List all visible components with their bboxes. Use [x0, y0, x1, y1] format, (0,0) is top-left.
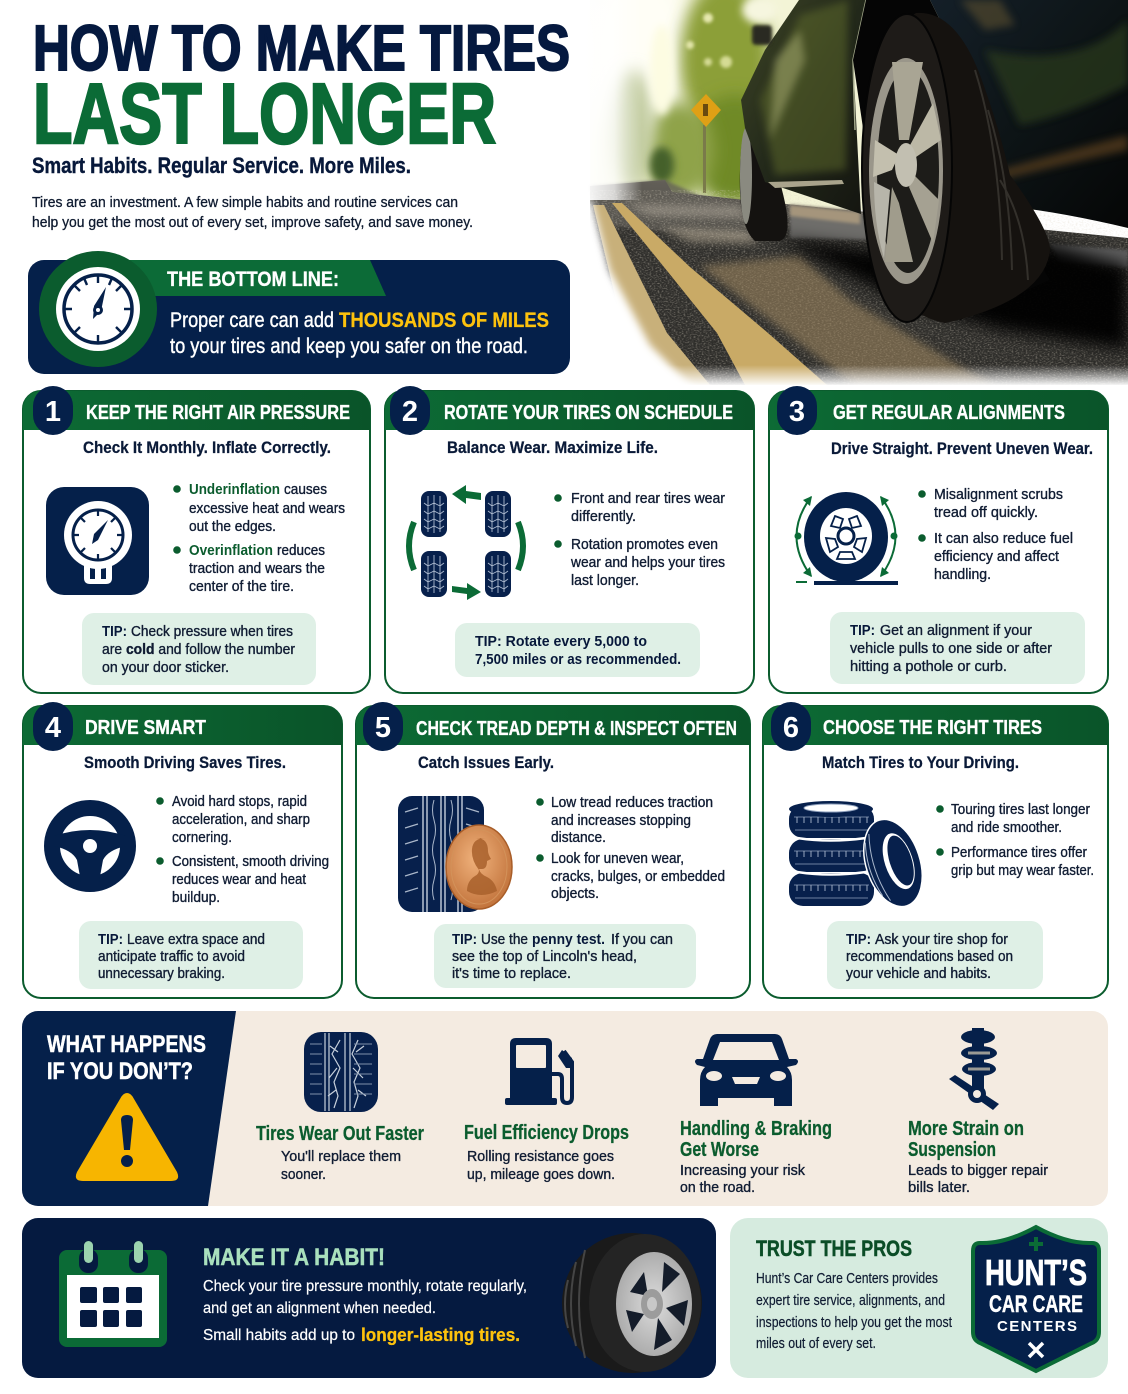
icon: stack of tires [789, 801, 933, 914]
panel: 2 rotate your tires on schedule [385, 386, 754, 693]
panel: 6 choose the right tires: and ride smoother. [951, 820, 1062, 836]
panel: 4 drive smart: buildup. [172, 890, 220, 906]
body text: Check your tire pressure monthly, rotate regularly, [203, 1278, 527, 1295]
panel: 1 keep the right air pressure: Overinflation [189, 543, 273, 559]
panel: 5 check tread depth: and increases stopping [551, 813, 691, 829]
panel: 4 drive smart: cornering. [172, 830, 232, 846]
panel: 5 check tread depth: distance. [551, 830, 606, 846]
panel: 5 check tread depth: CHECK TREAD DEPTH & INSPECT OFTEN [416, 718, 737, 740]
tip box: on your door sticker. [102, 660, 229, 676]
item: more strain on suspension: Leads to bigger repair [908, 1163, 1048, 1179]
item: tires wear out faster [256, 1123, 424, 1183]
panel: 1 keep the right air pressure: causes [284, 482, 327, 498]
logo: Hunt's badge [973, 1227, 1099, 1371]
panel: 4 drive smart: 4 [45, 712, 61, 744]
tip box: TIP: [846, 931, 871, 948]
panel: 4 drive smart: Avoid hard stops, rapid [172, 794, 307, 810]
panel: 5 check tread depth: Look for uneven wear, [551, 851, 684, 867]
tip box: TIP: [102, 623, 127, 640]
icon: calendar [59, 1241, 167, 1347]
body text [756, 1270, 953, 1352]
tip box [82, 613, 316, 685]
tip box [830, 612, 1085, 684]
icon: wheel alignment [794, 492, 898, 585]
heading: TRUST THE PROS [756, 1236, 912, 1261]
tip box: your vehicle and habits. [846, 966, 991, 982]
panel: 1 keep the right air pressure: Underinflation [189, 482, 280, 498]
icon: pressure gauge [46, 487, 149, 595]
title: HOW TO MAKE TIRES [33, 12, 570, 84]
rear wheel [740, 120, 788, 241]
panel: 2 rotate your tires on schedule: ROTATE YOUR TIRES ON SCHEDULE [444, 402, 733, 424]
panel: 2 rotate your tires on schedule: Front and rear tires wear [571, 491, 725, 507]
logo: Hunt's badge: CAR CARE [989, 1291, 1083, 1318]
icon: tire rotation diagram [409, 485, 523, 600]
panel: 3 get regular alignments: GET REGULAR ALIGNMENTS [833, 402, 1065, 424]
panel: 1 keep the right air pressure: reduces [277, 543, 325, 559]
tip box [455, 623, 700, 677]
callout: the bottom line [28, 251, 570, 374]
panel: 3 get regular alignments [769, 386, 1108, 693]
panel: 1 keep the right air pressure: Check It Monthly. Inflate Correctly. [83, 438, 331, 457]
item: fuel efficiency drops: up, mileage goes down. [467, 1167, 615, 1183]
tip box: unnecessary braking. [98, 966, 225, 982]
yellow road sign [691, 94, 721, 193]
panel: 6 choose the right tires: Performance tires offer [951, 845, 1087, 861]
body text: and get an alignment when needed. [203, 1300, 436, 1317]
main tire [862, 13, 1050, 323]
panel: 2 rotate your tires on schedule: differently. [571, 509, 636, 525]
panel: trust the pros [730, 1218, 1108, 1378]
tip box: it's time to replace. [452, 966, 571, 982]
body text [203, 1278, 527, 1345]
panel: 4 drive smart: DRIVE SMART [85, 717, 206, 739]
tip box: recommendations based on [846, 949, 1013, 965]
tip box [79, 921, 303, 989]
item: fuel efficiency drops [464, 1122, 629, 1183]
panel: make it a habit [22, 1218, 716, 1378]
item: fuel efficiency drops: Rolling resistance goes [467, 1149, 614, 1165]
panel: 6 choose the right tires: CHOOSE THE RIGHT TIRES [823, 717, 1042, 739]
left and bottom photo fade [570, 0, 1128, 395]
tip box: hitting a pothole or curb. [850, 659, 1007, 675]
intro paragraph [32, 194, 473, 231]
tip box: are cold and follow the number [102, 642, 295, 658]
panel: 1 keep the right air pressure: excessive heat and wears [189, 501, 345, 517]
panel: 6 choose the right tires: Match Tires to Your Driving. [822, 753, 1019, 772]
item: handling and braking: on the road. [680, 1180, 755, 1196]
body text: Small habits add up to [203, 1327, 355, 1344]
logo: Hunt's badge: CENTERS [997, 1318, 1077, 1335]
tip box: penny test. [532, 931, 605, 948]
item: more strain on suspension: Suspension [908, 1139, 996, 1161]
tip box: Ask your tire shop for [875, 932, 1008, 948]
panel: 4 drive smart: acceleration, and sharp [172, 812, 310, 828]
item: more strain on suspension: bills later. [908, 1180, 970, 1196]
tip box: 7,500 miles or as recommended. [475, 651, 681, 668]
car side panel [741, 0, 866, 214]
item: more strain on suspension: More Strain on [908, 1118, 1024, 1140]
alloy rim [869, 58, 943, 284]
panel: 2 rotate your tires on schedule: wear and helps your tires [570, 555, 725, 571]
panel: 1 keep the right air pressure: 1 [45, 396, 61, 428]
shadow under car [775, 238, 1128, 350]
body text: miles out of every set. [756, 1335, 876, 1352]
heading [47, 1031, 206, 1085]
panel: 3 get regular alignments: handling. [934, 567, 991, 583]
heading: WHAT HAPPENS [47, 1031, 206, 1058]
panel: 2 rotate your tires on schedule: Rotation promotes even [571, 537, 718, 553]
icon: warning triangle [76, 1093, 178, 1181]
panel: 4 drive smart [23, 702, 342, 998]
intro paragraph: Tires are an investment. A few simple habits and routine services can [32, 194, 458, 211]
icon: speedometer [39, 251, 157, 367]
item: fuel efficiency drops: Fuel Efficiency Drops [464, 1122, 629, 1144]
heading: MAKE IT A HABIT! [203, 1244, 385, 1271]
panel: 3 get regular alignments: Drive Straight. Prevent Uneven Wear. [831, 439, 1093, 458]
icon: tread and penny [398, 796, 512, 912]
heading: IF YOU DON’T? [47, 1058, 193, 1085]
callout: the bottom line: to your tires and keep you safer on the road. [170, 335, 528, 358]
panel: 4 drive smart: Smooth Driving Saves Tires. [84, 753, 286, 772]
icon: steering wheel [52, 808, 128, 884]
title: LAST LONGER [33, 67, 496, 162]
tip box: see the top of Lincoln's head, [452, 949, 637, 965]
panel: 1 keep the right air pressure: out the edges. [189, 519, 276, 535]
item: tires wear out faster: You'll replace them [281, 1149, 401, 1165]
callout: the bottom line: THOUSANDS OF MILES [339, 309, 549, 332]
callout: the bottom line: Proper care can add [170, 309, 334, 332]
panel: 3 get regular alignments: tread off quickly. [934, 505, 1038, 521]
title [33, 12, 570, 162]
logo: Hunt's badge: HUNT’S [985, 1252, 1087, 1293]
panel: 5 check tread depth [356, 702, 750, 998]
panel: 1 keep the right air pressure: traction and wears the [189, 561, 325, 577]
tip box: If you can [611, 932, 673, 948]
road surface [590, 180, 1128, 385]
panel: 2 rotate your tires on schedule: last longer. [571, 573, 639, 589]
tip box: TIP: [850, 622, 875, 639]
body text: longer-lasting tires. [361, 1325, 520, 1345]
tip box: TIP: [452, 931, 477, 948]
panel: 5 check tread depth: objects. [551, 886, 599, 902]
tip box: Leave extra space and [127, 932, 265, 948]
icon: car front [695, 1034, 798, 1106]
item: handling and braking: Get Worse [680, 1139, 759, 1161]
item: handling and braking [680, 1118, 832, 1196]
body text: expert tire service, alignments, and [756, 1292, 945, 1309]
intro paragraph: help you get the most out of every set, improve safety, and save money. [32, 214, 473, 231]
panel: 6 choose the right tires [763, 702, 1108, 998]
panel: 6 choose the right tires: grip but may wear faster. [951, 863, 1094, 879]
tip box: vehicle pulls to one side or after [850, 641, 1052, 657]
item: handling and braking: Increasing your risk [680, 1163, 806, 1179]
tip box: anticipate traffic to avoid [98, 949, 245, 965]
panel: 5 check tread depth: 5 [375, 712, 391, 744]
item: more strain on suspension [908, 1118, 1048, 1196]
tire photo [562, 1233, 702, 1373]
panel: 2 rotate your tires on schedule: 2 [402, 396, 418, 428]
panel: 6 choose the right tires: Touring tires last longer [951, 802, 1090, 818]
panel: 1 keep the right air pressure: center of the tire. [189, 579, 294, 595]
panel: 3 get regular alignments: Misalignment scrubs [934, 487, 1063, 503]
panel: 5 check tread depth: cracks, bulges, or embedded [551, 869, 725, 885]
tip box [434, 924, 696, 988]
panel: 6 choose the right tires: 6 [783, 712, 799, 744]
tip box [827, 921, 1043, 989]
tip box: TIP: [98, 931, 123, 948]
penny [446, 825, 512, 909]
tip box: Get an alignment if your [880, 623, 1032, 639]
tip box: Use the [481, 932, 528, 948]
subtitle: Smart Habits. Regular Service. More Miles. [32, 153, 411, 178]
panel: 5 check tread depth: Catch Issues Early. [418, 753, 554, 772]
body text: inspections to help you get the most [756, 1314, 953, 1331]
item: handling and braking: Handling & Braking [680, 1118, 832, 1140]
panel: 2 rotate your tires on schedule: Balance Wear. Maximize Life. [447, 438, 658, 457]
panel: 4 drive smart: reduces wear and heat [172, 872, 306, 888]
hero photo: car tire on road [570, 0, 1128, 395]
item: tires wear out faster: Tires Wear Out Faster [256, 1123, 424, 1145]
tip box: TIP: Rotate every 5,000 to [475, 633, 647, 650]
panel: 1 keep the right air pressure [23, 386, 370, 693]
icon: fuel pump [505, 1038, 572, 1105]
icon: worn tread [304, 1032, 378, 1112]
car fender [930, 0, 1128, 228]
panel: 4 drive smart: Consistent, smooth driving [172, 854, 329, 870]
panel: 3 get regular alignments: 3 [789, 396, 805, 428]
wheel well [853, 0, 963, 320]
panel: 3 get regular alignments: efficiency and affect [934, 549, 1059, 565]
icon: suspension [949, 1028, 999, 1110]
callout: the bottom line: THE BOTTOM LINE: [167, 268, 339, 291]
panel: 5 check tread depth: Low tread reduces traction [551, 795, 713, 811]
panel: 1 keep the right air pressure: KEEP THE RIGHT AIR PRESSURE [86, 402, 350, 424]
item: tires wear out faster: sooner. [281, 1167, 326, 1183]
tip box: Check pressure when tires [131, 624, 293, 640]
panel: 3 get regular alignments: It can also reduce fuel [934, 531, 1073, 547]
panel: what happens if you don't [22, 1011, 1108, 1206]
double yellow line [593, 203, 827, 385]
body text: Hunt’s Car Care Centers provides [756, 1270, 938, 1287]
